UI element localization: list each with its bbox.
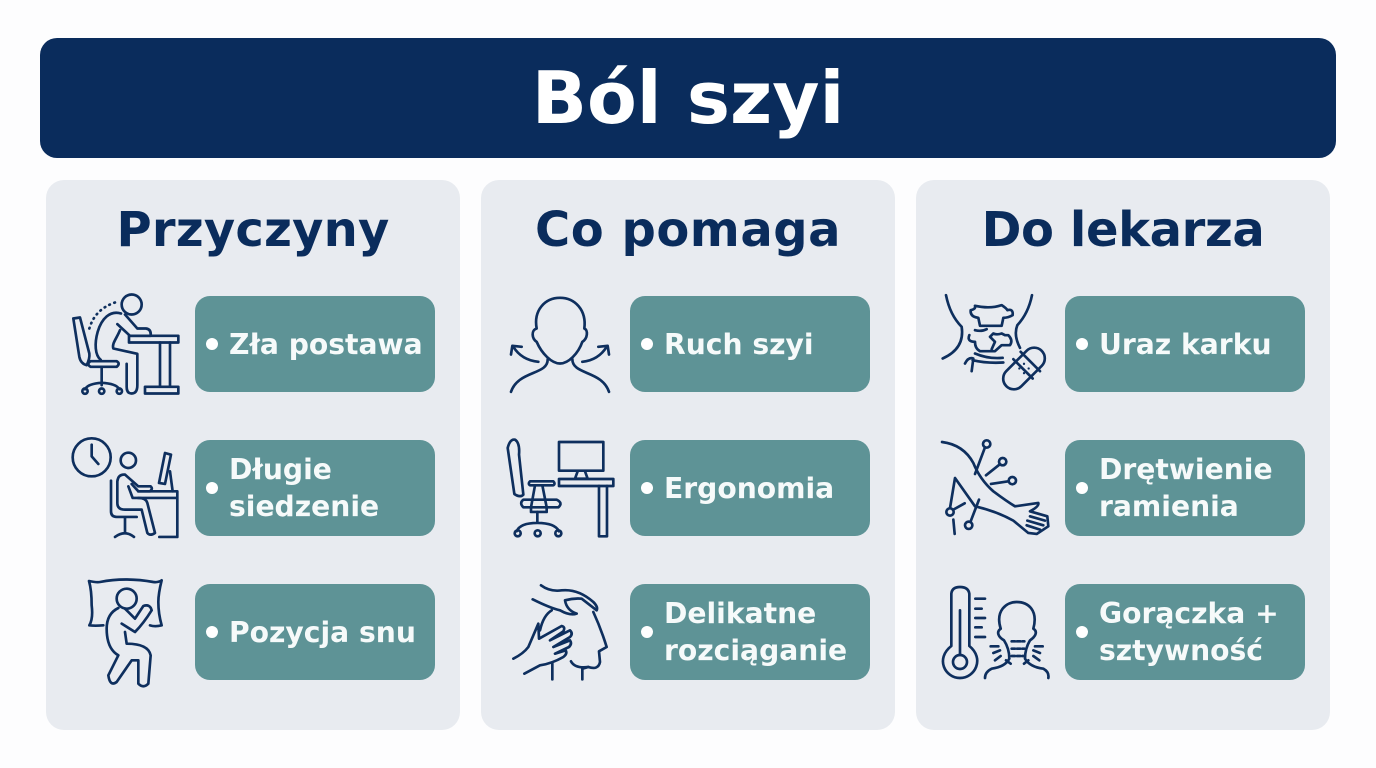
icon: neck injury with bandage <box>941 294 1046 391</box>
heading: Do lekarza: Do lekarza <box>982 202 1264 258</box>
pill: Uraz karku: Uraz karku <box>1099 328 1272 360</box>
panel: Przyczyny <box>46 180 460 730</box>
icon: ergonomic workstation <box>506 438 615 538</box>
pill: Długie siedzenie: siedzenie <box>229 490 379 523</box>
pill: Drętwienie ramienia <box>1065 440 1304 536</box>
heading: Co pomaga: Co pomaga <box>535 202 841 258</box>
pill: Gorączka + sztywność: sztywność <box>1099 634 1263 667</box>
pill: Gorączka + sztywność: Gorączka + <box>1099 597 1279 630</box>
pill: Długie siedzenie <box>195 440 434 536</box>
pill: Pozycja snu: Pozycja snu <box>229 616 416 648</box>
pill: Długie siedzenie: Długie <box>229 453 332 486</box>
pill: Ergonomia: Ergonomia <box>664 472 834 504</box>
icon: neck movement <box>510 296 610 394</box>
title: Ból szyi <box>532 57 844 141</box>
pill: Ruch szyi <box>630 296 870 392</box>
pill: Delikatne rozciąganie: rozciąganie <box>664 634 847 667</box>
panel: Do lekarza <box>916 180 1330 730</box>
pill: Zła postawa: Zła postawa <box>229 328 423 360</box>
icon: gentle stretching hands on head <box>512 584 608 681</box>
header banner <box>40 38 1336 158</box>
icon: arm numbness with nerve points <box>940 439 1050 536</box>
pill: Delikatne rozciąganie: Delikatne <box>664 597 816 630</box>
pill: Delikatne rozciąganie <box>630 584 870 680</box>
icon: thermometer and stiff neck <box>942 586 1050 680</box>
pill: Drętwienie ramienia: ramienia <box>1099 490 1239 523</box>
heading: Przyczyny: Przyczyny <box>116 202 390 258</box>
pill: Gorączka + sztywność <box>1065 584 1304 680</box>
pill: Zła postawa <box>195 296 434 392</box>
icon: long sitting with clock <box>71 437 179 538</box>
pill: Drętwienie ramienia: Drętwienie <box>1099 453 1273 486</box>
pill: Pozycja snu <box>195 584 434 680</box>
icon: sleeping position <box>88 578 163 688</box>
pill: Ergonomia <box>630 440 870 536</box>
pill: Ruch szyi: Ruch szyi <box>664 328 814 360</box>
icon: bad posture at desk <box>72 293 180 396</box>
pill: Uraz karku <box>1065 296 1304 392</box>
panel: Co pomaga <box>481 180 895 730</box>
